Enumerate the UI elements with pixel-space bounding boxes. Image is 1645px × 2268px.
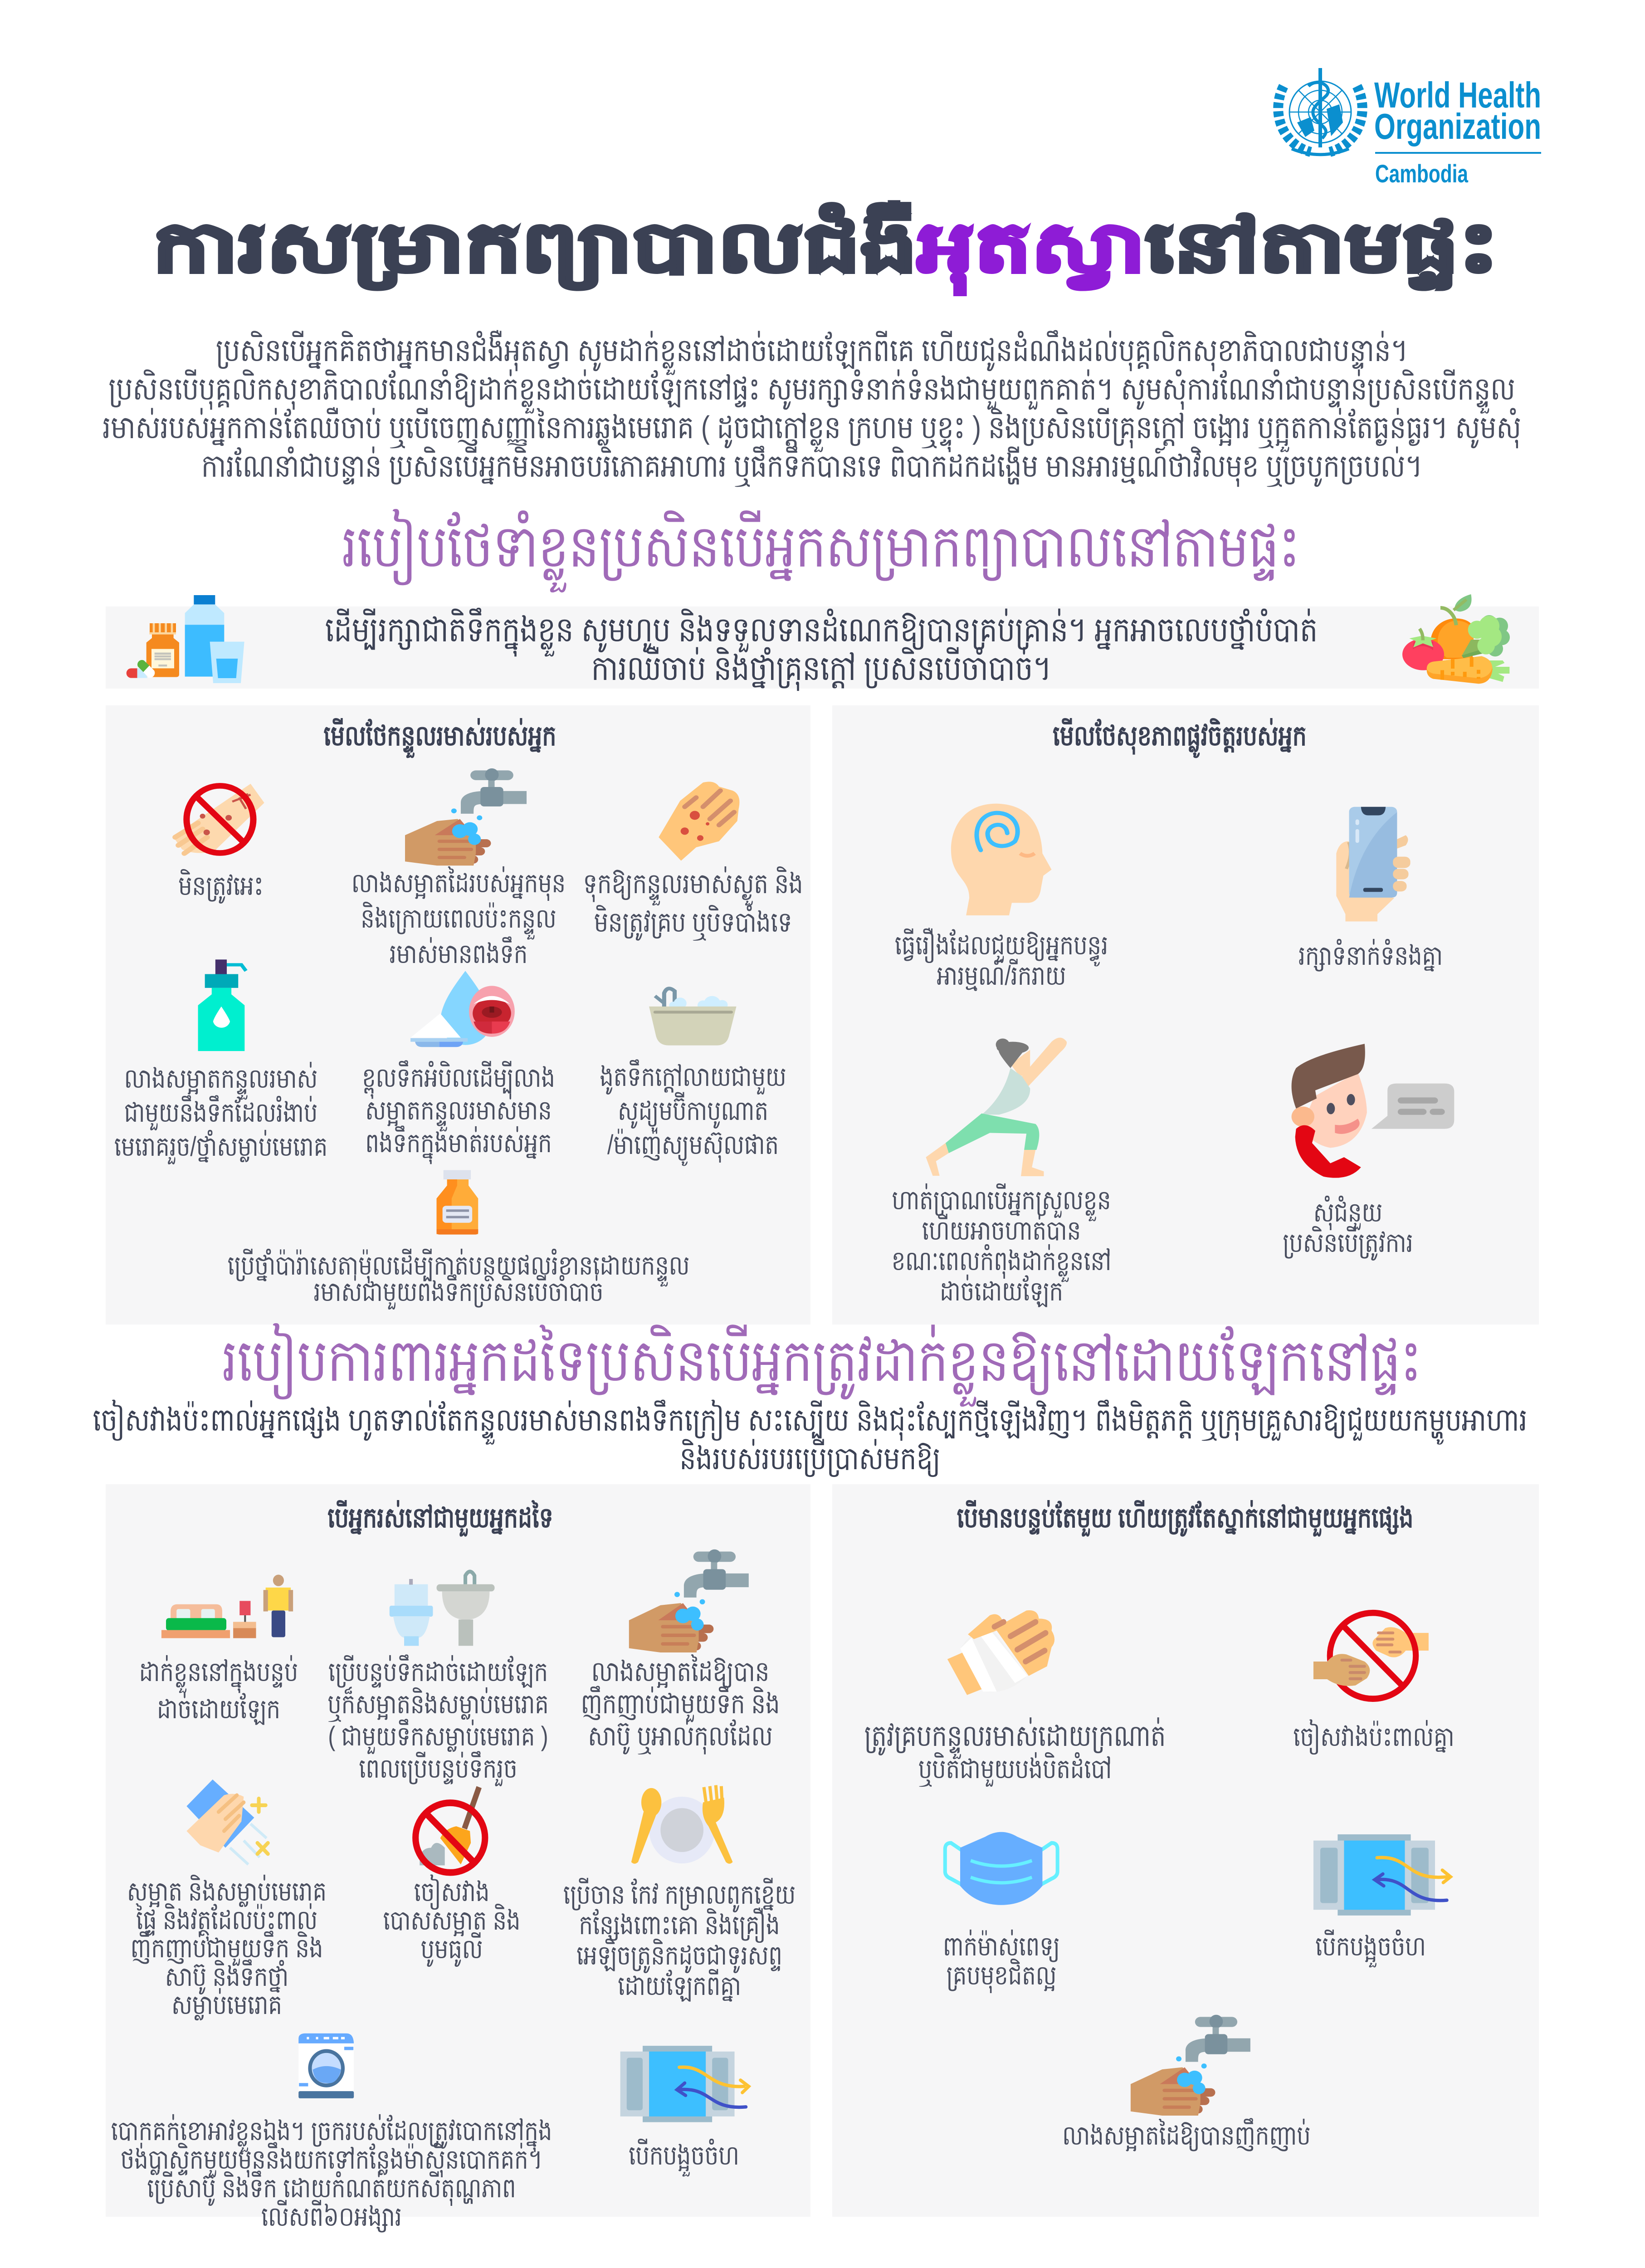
- text: wash hands: [368, 865, 549, 972]
- text: clean rash: [130, 1061, 312, 1163]
- text: open window: បើកបង្អួចចំហ: [1315, 1931, 1426, 1961]
- title: ការសម្រាកព្យាបាលជំងឺអុតស្វានៅតាមផ្ទះ: [152, 208, 1499, 286]
- icon: medicine and water: [104, 590, 286, 708]
- intro text: ប្រសិនបើអ្នកគិតថាអ្នកមានជំងឺអុតស្វា សូមដាក់ខ្លួននៅដាច់ដោយឡែកពីគេ ហើយជូនដំណឹងដល់បុគ្គលិកសុខាភិបាលជាបន្ទាន់។: [216, 332, 1408, 368]
- panel: living with others background: [106, 1484, 810, 2217]
- text: warm bath: សូដ្យូមប៊ីកាបូណាត: [618, 1095, 768, 1126]
- panel: hydration banner background: [106, 606, 1539, 689]
- text: paracetamol: ប្រើថ្នាំប៉ារ៉ាសេតាម៉ុលដើម្បីកាត់បន្ថយផលរំខានដោយកន្ទួល: [228, 1250, 689, 1281]
- text: avoid sweeping: បោសសម្អាត និង: [383, 1905, 520, 1936]
- heading: home care: របៀបថែទាំខ្លួនប្រសិនបើអ្នកសម្រាកព្យាបាលនៅតាមផ្ទះ: [342, 513, 1300, 579]
- icon: salt water mouth: [410, 971, 515, 1047]
- text: wash hands: លាងសម្អាតដៃរបស់អ្នកមុន: [351, 868, 566, 898]
- icon: head with spiral: [951, 804, 1052, 915]
- text: separate bathroom: ( ជាមួយទឹកសម្លាប់មេរោគ ): [328, 1721, 548, 1751]
- text: clean surfaces: [136, 1877, 317, 2019]
- text: stay connected: រក្សាទំនាក់ទំនងគ្នា: [1298, 940, 1443, 971]
- panel: single room: [832, 1484, 1539, 2217]
- text: rinse mouth: [368, 1061, 549, 1159]
- text: separate bathroom: ឬក៏សម្អាតនិងសម្លាប់មេរោគ: [327, 1689, 549, 1719]
- text: protect others: ចៀសវាងប៉ះពាល់អ្នកផ្សេង ហូតទាល់តែកន្ទួលរមាស់មានពងទឹកក្រៀម សះស្បើយ និងជុះស្បែកថ្មីឡើងវិញ។ ពឹងមិត្តភក្តិ ឬក្រុមគ្រួសារឱ្យជួយយកម្ហូបអាហារ: [93, 1402, 1527, 1437]
- text: rinse mouth: ខ្ពុលទឹកអំបិលដើម្បីលាង: [362, 1062, 555, 1093]
- icon: open window: [620, 2046, 749, 2122]
- WHO logo: Cambodia: [1375, 159, 1469, 188]
- panel: mental health background: [832, 705, 1539, 1325]
- text: laundry: ថង់ប្លាស្ទិកមួយមុននឹងយកទៅកន្លែងម៉ាស៊ីនបោកគក់។: [121, 2144, 542, 2175]
- text: clean rash: លាងសម្អាតកន្ទួលរមាស់: [124, 1063, 317, 1094]
- icon: no sweeping: [415, 1787, 485, 1872]
- text: relax: ធ្វើរឿងដែលជួយឱ្យអ្នកបន្ធូរ: [895, 930, 1108, 960]
- text: separate room: ដាច់ដោយឡែក: [157, 1694, 280, 1724]
- text: clean surfaces: ញឹកញាប់ជាមួយទឹក និង: [131, 1933, 323, 1963]
- text: wear mask: [911, 1932, 1092, 1990]
- text: warm bath: ងូតទឹកក្តៅលាយជាមួយ: [600, 1061, 786, 1092]
- text: wear mask: គ្របមុខជិតល្អ: [947, 1960, 1056, 1990]
- icon: plate and cutlery: [631, 1785, 733, 1864]
- text: separate bathroom: ប្រើបន្ទប់ទឹកដាច់ដោយឡែក: [328, 1657, 548, 1687]
- text: separate utensils: ដោយឡែកពីគ្នា: [618, 1970, 741, 2001]
- text: rinse mouth: ពងទឹកក្នុងមាត់របស់អ្នក: [365, 1128, 552, 1158]
- text: avoid sweeping: ចៀសវាង: [414, 1877, 489, 1907]
- icon: rash hand: [659, 782, 739, 861]
- text: rinse mouth: សម្អាតកន្ទួលរមាស់មាន: [365, 1095, 552, 1125]
- icon: washing machine: [298, 2033, 354, 2098]
- text: warm bath: [602, 1060, 784, 1162]
- text: keep dry: [602, 865, 784, 942]
- text: exercise: ដាច់ដោយឡែក: [940, 1276, 1063, 1306]
- icon: separate bedroom: [161, 1575, 291, 1638]
- text: ask for help: សុំជំនួយ: [1313, 1197, 1382, 1227]
- icon: wash hands: [1131, 2015, 1250, 2116]
- panel: rash care background: [106, 705, 810, 1325]
- intro text: រមាស់របស់អ្នកកាន់តែឈឺចាប់ ឬបើចេញសញ្ញានៃការឆ្លងមេរោគ ( ដូចជាក្តៅខ្លួន ក្រហម ឬខ្ទុះ ) និងប្រសិនបើគ្រុនក្តៅ ចង្អោរ ឬក្អួតកាន់តែធ្ងន់ធ្ងរ។ សូមសុំ: [103, 410, 1521, 445]
- icon: toilet and sink: [390, 1572, 495, 1646]
- banner text: ដើម្បីរក្សាជាតិទឹកក្នុងខ្លួន សូមហូប និងទទួលទានដំណេកឱ្យបានគ្រប់គ្រាន់។ អ្នកអាចលេបថ្នាំបំបាត់: [325, 611, 1318, 649]
- text: wear mask: ពាក់ម៉ាស់ពេទ្យ: [943, 1931, 1060, 1961]
- icons: living with others: [104, 1497, 821, 2245]
- text: keep dry: ទុកឱ្យកន្ទួលរមាស់ស្ងួត និង: [583, 868, 803, 899]
- text: wash hands often: ញឹកញាប់ជាមួយទឹក និង: [581, 1688, 780, 1720]
- text: do not scratch: មិនត្រូវអេះ: [178, 870, 264, 901]
- panel: single room background: [832, 1484, 1539, 2217]
- text: separate utensils: ប្រើចាន កែវ កម្រាលពូកខ្នើយ: [563, 1879, 796, 1910]
- heading: rash care: មើលថែកន្ទួលរមាស់របស់អ្នក: [323, 720, 556, 752]
- text: clean surfaces: សាប៊ូ និងទឹកថ្នាំ: [165, 1961, 288, 1991]
- text: clean surfaces: ផ្ទៃ និងវត្ថុដែលប៉ះពាល់: [136, 1904, 317, 1935]
- text: avoid contact: ចៀសវាងប៉ះពាល់គ្នា: [1293, 1721, 1455, 1752]
- text: wash hands often: [590, 1656, 771, 1752]
- intro text: ប្រសិនបើបុគ្គលិកសុខាភិបាលណែនាំឱ្យដាក់ខ្លួនដាច់ដោយឡែកនៅផ្ទះ សូមរក្សាទំនាក់ទំនងជាមួយពួកគាត់។ សូមសុំការណែនាំជាបន្ទាន់ប្រសិនបើកន្ទួល: [108, 371, 1515, 406]
- icon: calling for help: [1292, 1044, 1454, 1178]
- icon: wiping surface: [186, 1779, 268, 1864]
- text: avoid sweeping: [379, 1877, 524, 1963]
- text: laundry: លើសពី៦០អង្សារ: [261, 2201, 402, 2232]
- icon: do not scratch: [173, 784, 264, 853]
- panel: rash care: [106, 705, 810, 1325]
- text: separate room: [146, 1653, 291, 1728]
- text: clean rash: មេរោគរួច/ថ្នាំសម្លាប់មេរោគ: [114, 1131, 327, 1162]
- icon: wash hands: [629, 1549, 749, 1652]
- heading: mental health: មើលថែសុខភាពផ្លូវចិត្តរបស់អ្នក: [1053, 720, 1307, 752]
- text: wash hands: រមាស់មានពងទឹក: [390, 938, 527, 969]
- text: separate utensils: កន្សែងពោះគោ និងគ្រឿង: [579, 1910, 780, 1940]
- text: keep dry: មិនត្រូវគ្រប ឬបិទបាំងទេ: [594, 907, 792, 938]
- text: ask for help: ប្រសិនបើត្រូវការ: [1283, 1227, 1413, 1258]
- text: paracetamol: [259, 1252, 658, 1305]
- text: exercise: ហាត់ប្រាណបើអ្នកស្រួលខ្លួន: [892, 1185, 1111, 1215]
- text: separate bathroom: ពេលប្រើបន្ទប់ទឹករួច: [359, 1753, 517, 1784]
- WHO logo: [1270, 64, 1551, 191]
- text: cover rash: [888, 1719, 1142, 1785]
- icon: open window: [1313, 1834, 1450, 1916]
- text: separate bathroom: [347, 1656, 529, 1784]
- text: clean surfaces: សម្អាត និងសម្លាប់មេរោគ: [127, 1876, 327, 1906]
- text: ask for help: [1275, 1197, 1420, 1258]
- panel: mental health: [832, 705, 1539, 1325]
- icon: soap bottle: [198, 959, 246, 1051]
- intro text: ការណែនាំជាបន្ទាន់ ប្រសិនបើអ្នកមិនអាចបរិភោគអាហារ ឬផឹកទឹកបានទេ ពិបាកដកដង្ហើម មានអារម្មណ៍ថាវិលមុខ ឬច្របូកច្របល់។: [201, 448, 1422, 484]
- text: wash hands often: សាប៊ូ ឬអាល់កុលដែល: [588, 1721, 773, 1752]
- text: clean rash: ជាមួយនឹងទឹកដែលរំងាប់: [124, 1097, 317, 1128]
- text: exercise: ខណៈពេលកំពុងដាក់ខ្លួននៅ: [892, 1246, 1111, 1276]
- icon: exercise: [926, 1038, 1067, 1176]
- text: laundry: [150, 2116, 513, 2231]
- text: warm bath: /ម៉ាញ៉េស្យូមស៊ុលផាត: [607, 1129, 779, 1160]
- panel: living with others: [106, 1484, 810, 2217]
- text: wash hands: លាងសម្អាតដៃឱ្យបានញឹកញាប់: [1062, 2120, 1311, 2151]
- text: relax: [911, 930, 1092, 991]
- text: cover rash: ត្រូវគ្របកន្ទួលរមាស់ដោយក្រណាត់: [864, 1719, 1166, 1752]
- text: exercise: ហើយអាចហាត់បាន: [922, 1215, 1081, 1246]
- icon: wash hands: [405, 768, 527, 865]
- text: relax: អារម្មណ៍/រីករាយ: [937, 960, 1066, 991]
- text: separate utensils: អេឡិចត្រូនិកដូចជាទូរសព្ទ: [576, 1940, 782, 1970]
- icons: single room: [839, 1497, 1556, 2245]
- text: exercise: [911, 1185, 1092, 1306]
- text: laundry: ប្រើសាប៊ូ និងទឹក ដោយកំណត់យកសីតុណ្ហភាព: [147, 2173, 516, 2203]
- WHO logo: World Health: [1374, 75, 1541, 115]
- icon: face mask: [945, 1832, 1058, 1905]
- banner text: [410, 611, 1233, 688]
- icon: no contact: [1313, 1613, 1429, 1699]
- icon: medicine bottle: [437, 1170, 478, 1235]
- text: protect others: [199, 1401, 1421, 1478]
- text: laundry: បោកគក់ខោអាវខ្លួនឯង។ ច្រករបស់ដែលត្រូវបោកនៅក្នុង: [111, 2116, 552, 2146]
- text: clean surfaces: សម្លាប់មេរោគ: [171, 1989, 282, 2020]
- banner text: ការឈឺចាប់ និងថ្នាំគ្រុនក្តៅ ប្រសិនបើចាំបាច់។: [591, 649, 1051, 688]
- icon: bandaged hand: [947, 1610, 1054, 1695]
- text: avoid sweeping: បូមធូលី: [420, 1934, 483, 1964]
- icons: mental health: [839, 708, 1556, 1343]
- heading: living with others: បើអ្នករស់នៅជាមួយអ្នកដទៃ: [327, 1502, 553, 1534]
- text: separate utensils: [589, 1879, 770, 2001]
- text: paracetamol: រមាស់ជាមួយពងទឹកប្រសិនបើចាំបាច់: [314, 1276, 603, 1307]
- icons: rash care: [104, 708, 821, 1343]
- WHO logo: Organization: [1374, 106, 1541, 147]
- text: separate room: ដាក់ខ្លួននៅក្នុងបន្ទប់: [139, 1657, 298, 1687]
- text: cover rash: ឬបិតជាមួយបង់បិតដំបៅ: [918, 1754, 1112, 1784]
- icon: bath tub: [649, 988, 737, 1046]
- text: open window: បើកបង្អួចចំហ: [629, 2140, 739, 2170]
- heading: single room: បើមានបន្ទប់តែមួយ ហើយត្រូវតែស្នាក់នៅជាមួយអ្នកផ្សេង: [957, 1502, 1413, 1534]
- icon: phone in hand: [1336, 807, 1411, 921]
- text: wash hands often: លាងសម្អាតដៃឱ្យបាន: [591, 1656, 769, 1687]
- text: protect others: និងរបស់របរប្រើប្រាស់មកឱ្យ: [679, 1441, 941, 1476]
- text: wash hands: និងក្រោយពេលប៉ះកន្ទួល: [361, 903, 556, 934]
- heading: protect others: របៀបការពារអ្នកដទៃប្រសិនបើអ្នកត្រូវដាក់ខ្លួនឱ្យនៅដោយឡែកនៅផ្ទះ: [222, 1327, 1421, 1393]
- intro text: [232, 331, 1391, 485]
- icon: fruit and vegetables: [1397, 590, 1556, 708]
